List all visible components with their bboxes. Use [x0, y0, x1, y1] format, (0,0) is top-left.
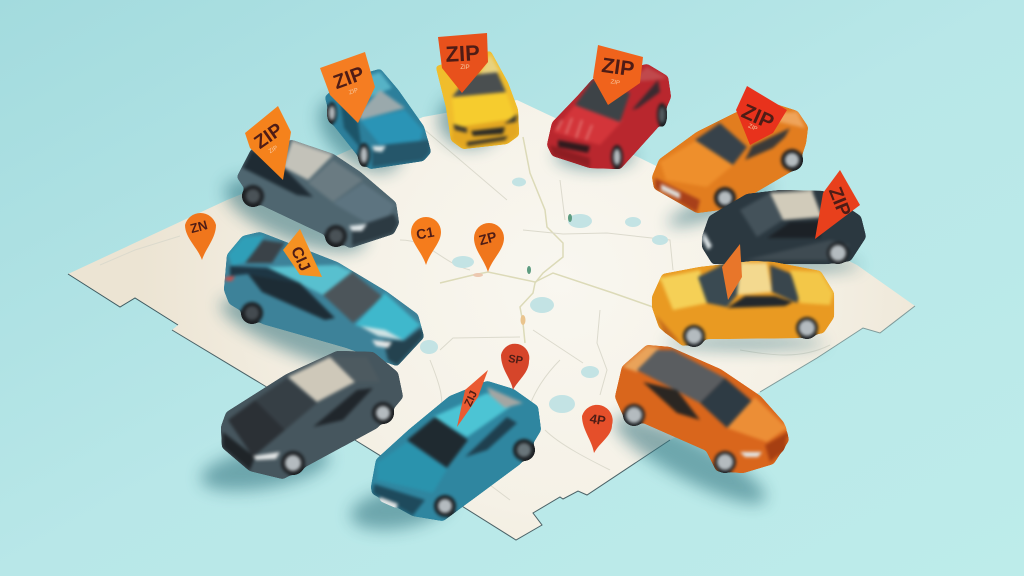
pin: ZP — [474, 223, 504, 272]
pin: red SP: SP — [507, 353, 524, 367]
roads — [100, 130, 830, 500]
flag: ZIP on blue car — [320, 52, 375, 123]
pin: ZN — [185, 213, 216, 260]
car: teal hatchback — [372, 382, 540, 520]
car: teal sedan — [225, 233, 423, 365]
flag: CIJ on teal sedan: CIJ — [287, 244, 313, 274]
flag: ZIP on dark car — [815, 170, 860, 239]
flag: ZIP on red car — [593, 45, 643, 105]
flag: ZIP on red car: ZIP — [610, 79, 620, 87]
pin: 4P: 4P — [589, 411, 607, 428]
flag: on teal hatchback: ZIJ — [462, 389, 480, 408]
flag: ZIP on orange car: ZIP — [747, 123, 758, 133]
car shadows — [198, 83, 860, 536]
map water labels — [420, 178, 668, 413]
pin: red SP — [501, 344, 529, 390]
car: yellow and orange sedan — [653, 262, 833, 347]
pin: C1: C1 — [415, 224, 436, 243]
flag: ZIP on slate car — [245, 106, 291, 180]
flag: ZIP on slate car: ZIP — [251, 119, 287, 154]
pin: ZN: ZN — [189, 217, 209, 236]
flag: ZIP on yellow car: ZIP — [445, 40, 480, 67]
car: blue sedan — [326, 70, 430, 168]
car: dark coupe — [703, 191, 865, 264]
small green markers — [527, 214, 572, 274]
flag: ZIP on yellow car: ZIP — [460, 65, 470, 71]
pin: 4P — [582, 405, 613, 453]
flag: ZIP on blue car: ZIP — [348, 88, 359, 96]
flag: ZIP on orange car: ZIP — [738, 100, 777, 134]
flag: ZIP on red car: ZIP — [600, 54, 636, 81]
car: orange coupe — [653, 105, 807, 212]
flag: ZIP on slate car: ZIP — [268, 145, 279, 155]
car: slate grey hatchback — [238, 141, 398, 247]
road junction marks — [473, 273, 526, 325]
pin: C1 — [411, 217, 441, 265]
flag: ZIP on dark car: ZIP — [824, 184, 854, 220]
map sheet — [68, 100, 915, 540]
flag: ZIP on yellow car — [438, 33, 488, 93]
flag: CIJ on teal sedan — [283, 229, 322, 277]
flag: ZIP on blue car: ZIP — [331, 63, 367, 94]
car: yellow sedan — [437, 52, 518, 148]
flag: folded on yellow sedan — [722, 244, 742, 300]
pin: ZP: ZP — [477, 228, 498, 248]
flag: on teal hatchback — [457, 370, 488, 427]
flag: ZIP on orange car — [736, 86, 787, 145]
car: burnt orange hatchback — [616, 346, 788, 473]
car: red SUV — [548, 65, 670, 169]
car: dark sedan — [222, 352, 402, 478]
